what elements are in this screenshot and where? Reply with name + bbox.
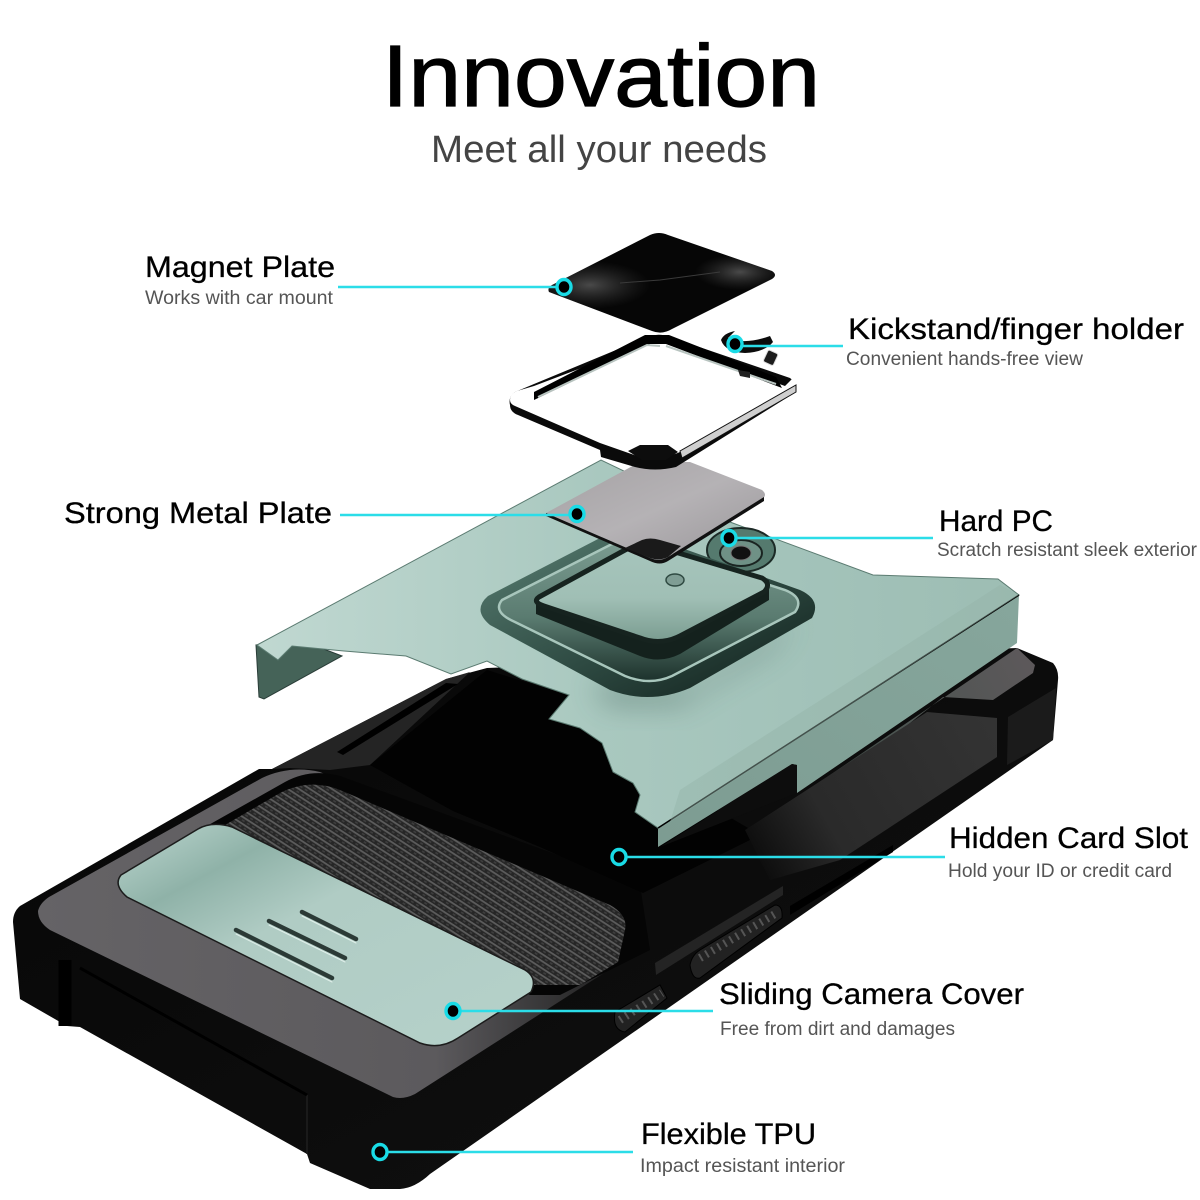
callout: flexible TPU: Flexible TPU bbox=[641, 1118, 816, 1151]
left corner seams bbox=[58, 960, 72, 1026]
frame white face bbox=[510, 340, 796, 457]
callout: kickstand: Kickstand/finger holder bbox=[848, 313, 1184, 346]
ring rim bbox=[499, 541, 798, 681]
side strip bbox=[745, 712, 997, 880]
ring base bbox=[480, 532, 815, 697]
phone case body bbox=[13, 648, 1058, 1189]
camera bump bbox=[707, 528, 775, 572]
strong metal plate bbox=[546, 462, 765, 564]
kickstand bbox=[721, 331, 778, 378]
callout: magnet plate: Magnet Plate bbox=[145, 251, 335, 284]
upper black inner edges bbox=[534, 335, 782, 400]
white ring frame bbox=[510, 335, 796, 470]
left flap bbox=[256, 640, 342, 699]
callout: flexible TPU bbox=[373, 1118, 846, 1177]
sliding camera cover bbox=[118, 824, 533, 1046]
raised square side bbox=[536, 580, 769, 660]
pin hole bbox=[666, 574, 684, 586]
camera recess bbox=[205, 773, 650, 995]
side slot and buttons bbox=[655, 886, 783, 975]
callout: hard PC bbox=[722, 505, 1198, 561]
callout: hard PC: Hard PC bbox=[939, 505, 1053, 538]
top face bbox=[257, 460, 1019, 828]
callout: kickstand bbox=[728, 313, 1184, 370]
raised square top bbox=[536, 545, 768, 642]
callout: strong metal plate: Strong Metal Plate bbox=[64, 497, 332, 530]
hard PC green shell bbox=[256, 460, 1019, 847]
title: Innovation bbox=[382, 28, 820, 125]
carbon fiber panel bbox=[225, 785, 625, 985]
callout: sliding camera cover: Free from dirt and damages bbox=[720, 1019, 955, 1040]
notch on side bbox=[660, 764, 797, 847]
black outer shell bbox=[13, 648, 1058, 1189]
slit bbox=[337, 683, 458, 755]
card slot recess bbox=[370, 670, 760, 893]
callout: hidden card slot: Hold your ID or credit card bbox=[948, 861, 1172, 882]
slider grooves bbox=[236, 912, 356, 982]
callout: flexible TPU: Impact resistant interior bbox=[640, 1156, 846, 1177]
callout: hidden card slot bbox=[612, 822, 1189, 882]
callout: magnet plate bbox=[145, 251, 571, 309]
callout: sliding camera cover: Sliding Camera Cover bbox=[719, 978, 1024, 1011]
subtitle: Meet all your needs bbox=[431, 129, 767, 171]
side wall bbox=[658, 595, 1019, 847]
front gray band bbox=[680, 385, 796, 458]
callout: sliding camera cover bbox=[446, 978, 1024, 1040]
callout: hidden card slot: Hidden Card Slot bbox=[949, 822, 1189, 855]
corner block bbox=[1007, 688, 1056, 765]
ring holder bbox=[480, 532, 815, 697]
callout: magnet plate: Works with car mount bbox=[145, 288, 334, 309]
black corner bbox=[625, 538, 681, 559]
callout: kickstand: Convenient hands-free view bbox=[846, 349, 1083, 370]
right upper panel bbox=[793, 648, 1035, 810]
callout: strong metal plate bbox=[64, 497, 584, 530]
ring shadow bbox=[590, 620, 800, 705]
top face gray bbox=[38, 770, 640, 1098]
face sheen bbox=[670, 585, 1019, 822]
callout: hard PC: Scratch resistant sleek exterior bbox=[937, 540, 1198, 561]
magnet plate bbox=[548, 233, 775, 333]
frame outer dark edge bbox=[510, 335, 796, 470]
upper band bbox=[272, 672, 470, 770]
front corner clip bbox=[628, 445, 678, 460]
